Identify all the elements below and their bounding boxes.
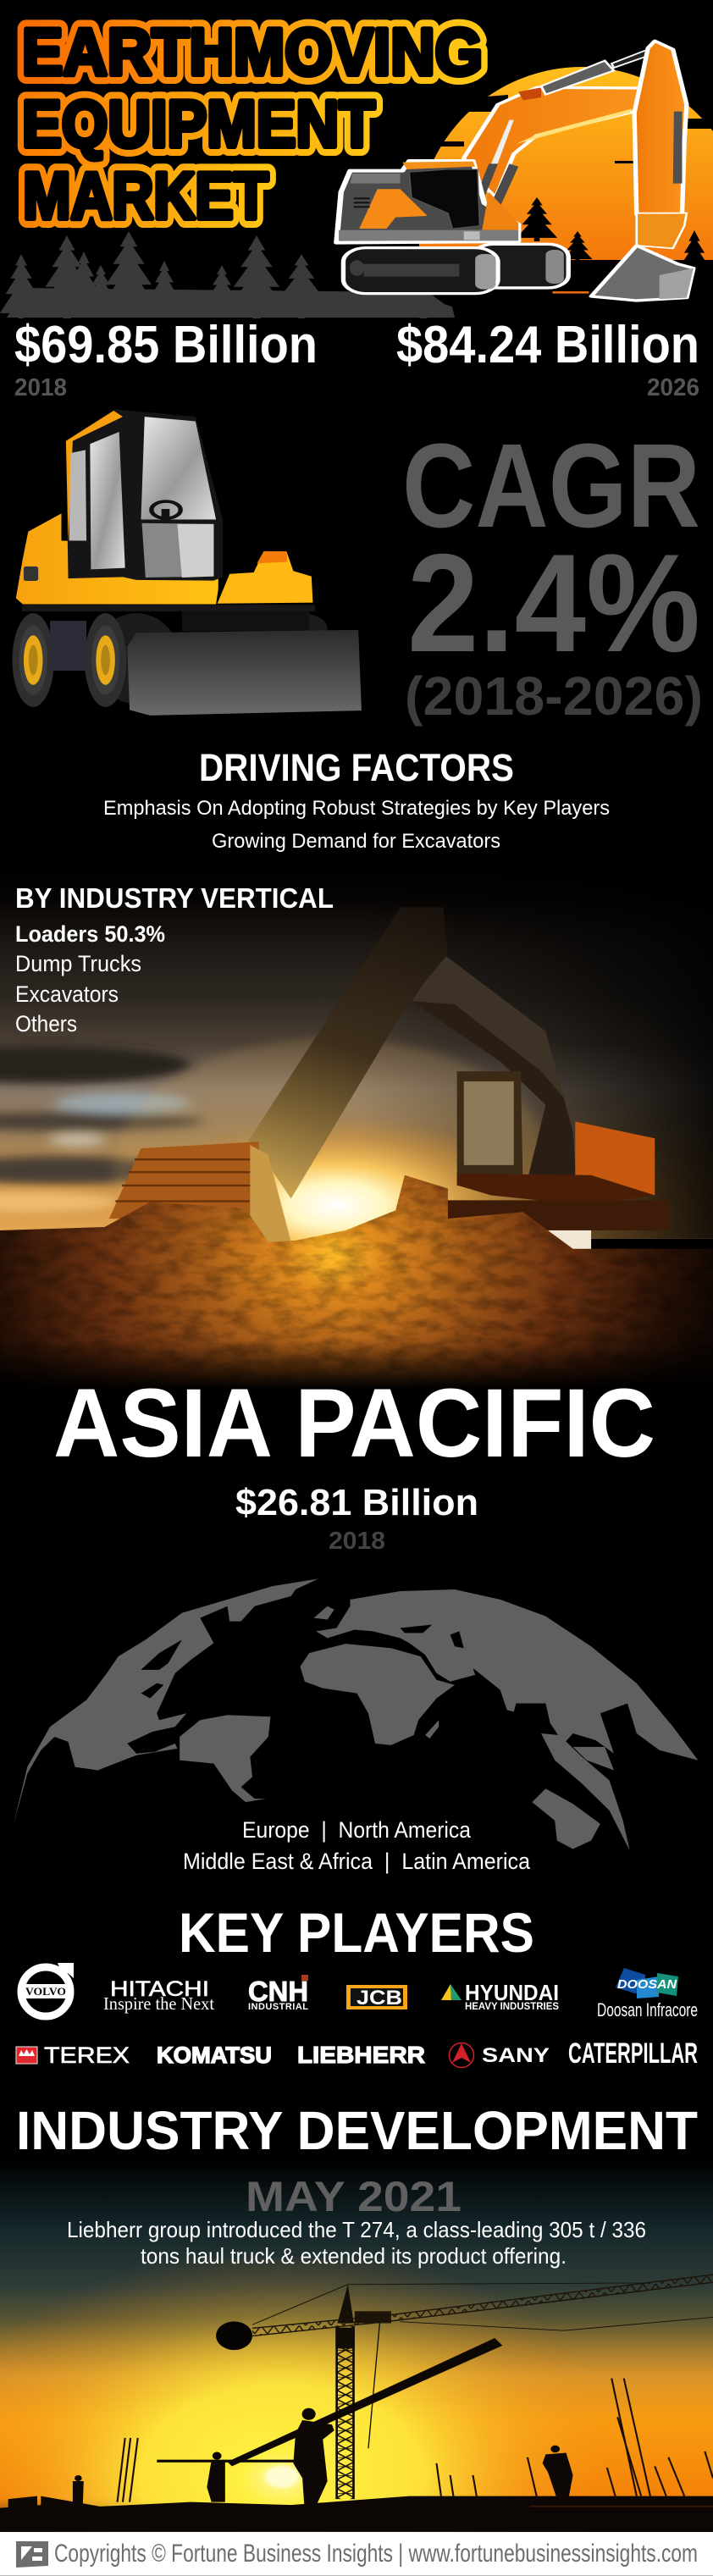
- north america: [14, 1578, 318, 1824]
- title: [22, 14, 483, 233]
- machine body: [16, 513, 218, 604]
- rebar columns: [118, 2379, 713, 2502]
- tower crane: [216, 2274, 713, 2499]
- logo: cnh industrial: CNH: [248, 1976, 308, 2007]
- logo: liebherr: LIEBHERR: [297, 2042, 425, 2068]
- ground: [0, 2496, 713, 2532]
- excavator hydraulic cylinders: [475, 49, 650, 231]
- heading: asia pacific: ASIA PACIFIC: [53, 1369, 655, 1478]
- world map globe: [14, 1578, 698, 1850]
- logo: volvo: VOLVO: [25, 1985, 66, 1998]
- logo: hyundai: [441, 1980, 559, 2012]
- excavator arm: [634, 41, 687, 214]
- stat: CAGR: (2018-2026): [405, 666, 703, 727]
- driving factors: Growing Demand for Excavators: [212, 830, 500, 853]
- stat: 2018 market size: $69.85 Billion: [14, 316, 318, 374]
- southeast asia islands: [541, 1733, 630, 1850]
- excavator silhouette: [109, 907, 668, 1251]
- footer logo: [16, 2541, 48, 2568]
- stat: asia pacific value: $26.81 Billion: [235, 1482, 478, 1523]
- title: EARTHMOVING: [22, 14, 483, 89]
- logo: hitachi: [103, 1977, 214, 2014]
- title: MARKET: [23, 158, 268, 233]
- logo: hyundai: HEAVY INDUSTRIES: [465, 2000, 559, 2012]
- australia: [532, 1788, 600, 1849]
- excavator bucket: [552, 246, 694, 301]
- logo: cnh industrial: INDUSTRIAL: [248, 2002, 308, 2012]
- black and caspian seas: [401, 1625, 432, 1633]
- stat: 2018 market size: [14, 316, 318, 401]
- sky clouds: [0, 1046, 205, 1212]
- heading: industry development: INDUSTRY DEVELOPMENT: [16, 2100, 698, 2161]
- logo: volvo: [19, 1963, 74, 2016]
- driving factors: [103, 746, 610, 853]
- stat: asia pacific value: 2018: [329, 1528, 385, 1555]
- excavator tracks: [343, 244, 568, 294]
- logo: hitachi: Inspire the Next: [103, 1993, 214, 2014]
- by industry vertical: BY INDUSTRY VERTICAL: [15, 882, 334, 914]
- machine chassis: [22, 605, 315, 611]
- heading: key players: KEY PLAYERS: [179, 1901, 534, 1964]
- illustration: gray tree line: [0, 231, 455, 318]
- driving factors: DRIVING FACTORS: [199, 746, 514, 789]
- illustration: sun with clouds and trees: [406, 67, 713, 290]
- hudson bay: [141, 1639, 182, 1670]
- eurasia: [316, 1589, 698, 1761]
- stat: 2026 market size: 2026: [647, 374, 699, 401]
- machine blade: [127, 630, 362, 716]
- by industry vertical: Excavators: [15, 981, 119, 1007]
- stat: 2018 market size: 2018: [14, 374, 67, 401]
- excavator boom: [464, 87, 644, 197]
- logo: sany: [449, 2043, 550, 2068]
- ground dirt: [0, 1175, 713, 1389]
- logo: doosan: [597, 1968, 698, 2020]
- stat: asia pacific value: [235, 1482, 478, 1555]
- title: MARKET: [23, 158, 268, 233]
- logo: terex: TEREX: [44, 2043, 130, 2068]
- machine wheels: [12, 611, 328, 707]
- logo: jcb: JCB: [356, 1987, 402, 2009]
- photo: excavator at sunset: [0, 864, 713, 1390]
- logo: hyundai: HYUNDAI: [465, 1980, 559, 2005]
- logo: komatsu: KOMATSU: [157, 2043, 272, 2068]
- development date and text: MAY 2021: [246, 2173, 462, 2220]
- by industry vertical: [15, 882, 334, 1036]
- development date and text: Liebherr group introduced the T 274, a class-leading 305 t / 336: [67, 2217, 646, 2242]
- madagascar: [425, 1720, 439, 1739]
- other regions: [183, 1817, 531, 1874]
- by industry vertical: Dump Trucks: [15, 951, 141, 976]
- excavator house: [336, 161, 518, 243]
- uk islands: [314, 1606, 334, 1620]
- illustration: wheeled excavator: [12, 409, 362, 716]
- logo: doosan: DOOSAN: [617, 1977, 677, 1992]
- logo: jcb: [346, 1985, 407, 2009]
- africa: [300, 1644, 455, 1745]
- development date and text: tons haul truck & extended its product offering.: [141, 2243, 567, 2269]
- stat: CAGR: [402, 418, 703, 727]
- title: EQUIPMENT: [22, 86, 375, 161]
- illustration: excavator: [336, 41, 694, 301]
- logo: terex: [16, 2043, 130, 2068]
- photo: construction site at sunset: [0, 2109, 713, 2532]
- by industry vertical: Others: [15, 1011, 77, 1036]
- by industry vertical: Loaders 50.3%: [15, 921, 165, 947]
- other regions: Europe | North America: [242, 1817, 472, 1843]
- logo: hitachi: HITACHI: [110, 1977, 209, 2001]
- logo: sany: SANY: [482, 2044, 550, 2067]
- stat: 2026 market size: [396, 316, 699, 401]
- title: EARTHMOVING: [22, 14, 483, 89]
- development date and text: [67, 2173, 646, 2269]
- title: EQUIPMENT: [22, 86, 375, 161]
- other regions: Middle East & Africa | Latin America: [183, 1849, 531, 1874]
- driving factors: Emphasis On Adopting Robust Strategies by Key Players: [103, 797, 610, 820]
- workers carrying pipe: [8, 2338, 573, 2511]
- south america: [180, 1715, 271, 1802]
- machine cab: [66, 409, 223, 581]
- footer: [0, 2532, 713, 2576]
